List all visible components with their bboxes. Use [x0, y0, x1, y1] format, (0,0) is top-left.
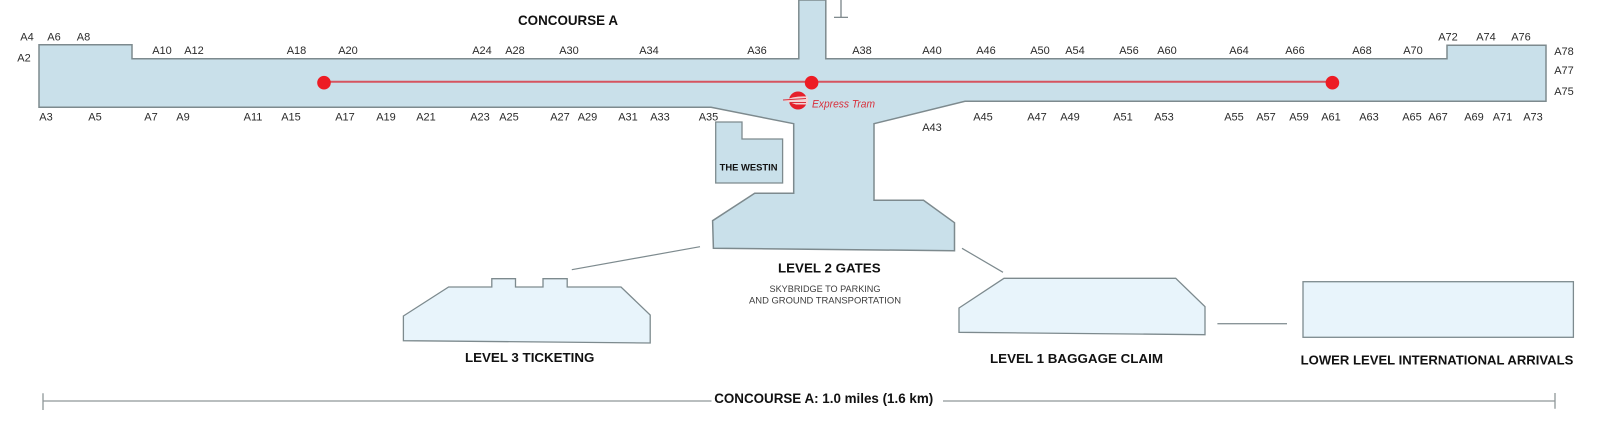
tram line with three stations — [317, 76, 1339, 89]
gate labels: lower row: A53 — [1154, 112, 1174, 124]
heading: level 3 ticketing: LEVEL 3 TICKETING — [465, 350, 594, 365]
text block: skybridge note: AND GROUND TRANSPORTATION — [749, 296, 901, 306]
gate labels: lower row: A5 — [88, 112, 102, 124]
gate labels: upper row: A34 — [639, 45, 659, 57]
gate labels: upper row: A4 — [20, 31, 34, 43]
gate labels: upper row: A30 — [559, 45, 579, 57]
gate labels: lower row: A73 — [1523, 112, 1543, 124]
panel: The Westin: THE WESTIN — [720, 162, 778, 174]
gate labels: upper row: A78 — [1554, 46, 1574, 58]
gate labels: upper row: A60 — [1157, 45, 1177, 57]
gate labels: lower row: A49 — [1060, 112, 1080, 124]
gate labels: upper row: A46 — [976, 45, 996, 57]
gate labels: lower row: A43 — [922, 122, 942, 134]
gate labels: lower row: A45 — [973, 112, 993, 124]
gate labels: upper row: A24 — [472, 45, 492, 57]
gate labels: lower row: A9 — [176, 112, 190, 124]
heading: level 1 baggage claim: LEVEL 1 BAGGAGE CLAIM — [990, 351, 1163, 366]
gate labels: upper row: A76 — [1511, 31, 1531, 43]
panel: level 3 ticketing — [403, 279, 650, 343]
gate labels: lower row: A67 — [1428, 112, 1448, 124]
gate labels: lower row: A17 — [335, 112, 355, 124]
gate labels: lower row: A47 — [1027, 112, 1047, 124]
gate labels: upper row: A36 — [747, 45, 767, 57]
gate labels: upper row: A74 — [1476, 31, 1496, 43]
gate labels: upper row: A10 — [152, 45, 172, 57]
heading: lower level international arrivals: LOWER LEVEL INTERNATIONAL ARRIVALS — [1301, 353, 1573, 368]
gate labels: lower row: A7 — [144, 112, 158, 124]
gate labels: lower row: A21 — [416, 112, 436, 124]
connector: level 1 to international arrivals — [1217, 323, 1287, 325]
gate labels: upper row: A18 — [287, 45, 306, 57]
gate labels: upper row: A50 — [1030, 45, 1050, 57]
gate labels: lower row: A71 — [1493, 112, 1512, 124]
gate labels: lower row: A25 — [499, 112, 519, 124]
express tram label: Express Tram — [812, 98, 875, 110]
gate labels: upper row: A28 — [505, 45, 525, 57]
gate labels: upper row: A20 — [338, 45, 358, 57]
gate labels: lower row: A33 — [650, 112, 670, 124]
gate labels: lower row: A29 — [578, 112, 597, 124]
gate labels: upper row — [17, 31, 1574, 98]
gate labels: upper row: A72 — [1438, 31, 1458, 43]
connector: level 2 to level 3 — [572, 247, 700, 270]
gate labels: upper row: A68 — [1352, 45, 1372, 57]
text block: skybridge note — [749, 284, 901, 306]
text block: skybridge note: SKYBRIDGE TO PARKING — [770, 284, 880, 295]
gate labels: lower row: A23 — [470, 112, 490, 124]
gate labels: upper row: A66 — [1285, 45, 1305, 57]
gate labels: lower row: A19 — [376, 112, 396, 124]
gate labels: lower row: A57 — [1256, 112, 1276, 124]
gate labels: upper row: A40 — [922, 45, 942, 57]
gate labels: lower row: A35 — [699, 112, 718, 124]
scale bar — [43, 393, 1555, 410]
gate labels: lower row: A3 — [39, 112, 53, 124]
panel: level 1 baggage claim — [959, 278, 1205, 335]
gate labels: upper row: A8 — [77, 31, 90, 43]
panel: The Westin — [716, 122, 783, 183]
panel: concourse A floor plan — [39, 0, 1546, 251]
gate labels: lower row: A51 — [1113, 112, 1133, 124]
gate labels: upper row: A12 — [184, 45, 204, 57]
gate labels: upper row: A70 — [1403, 45, 1423, 57]
gate labels: lower row: A61 — [1321, 112, 1341, 124]
gate labels: upper row: A2 — [17, 52, 31, 64]
scale bar label: CONCOURSE A: 1.0 miles (1.6 km) — [714, 391, 933, 406]
heading: level 2 gates: LEVEL 2 GATES — [778, 260, 881, 276]
gate labels: upper row: A56 — [1119, 45, 1139, 57]
gate labels: lower row: A59 — [1289, 112, 1309, 124]
gate labels: upper row: A38 — [852, 45, 872, 57]
gate labels: lower row: A27 — [550, 112, 570, 124]
gate labels: lower row: A63 — [1359, 112, 1379, 124]
gate labels: upper row: A54 — [1065, 45, 1085, 57]
connector: level 2 to level 1 — [962, 248, 1003, 272]
gate labels: upper row: A77 — [1554, 65, 1574, 77]
icon: express tram logo — [783, 92, 808, 110]
gate labels: lower row: A11 — [244, 112, 262, 124]
gate labels: lower row: A65 — [1402, 112, 1422, 124]
gate labels: lower row: A55 — [1224, 112, 1244, 124]
gate labels: lower row: A31 — [618, 112, 638, 124]
gate labels: upper row: A75 — [1554, 86, 1574, 98]
gate labels: upper row: A6 — [47, 31, 61, 43]
gate labels: lower row: A69 — [1464, 112, 1484, 124]
gate labels: lower row: A15 — [281, 112, 301, 124]
panel: lower level international arrivals — [1303, 282, 1573, 337]
gate labels: upper row: A64 — [1229, 45, 1249, 57]
gate labels: lower row — [39, 112, 1543, 134]
tick mark near stem — [834, 0, 848, 17]
heading: concourse A: CONCOURSE A — [518, 12, 618, 28]
